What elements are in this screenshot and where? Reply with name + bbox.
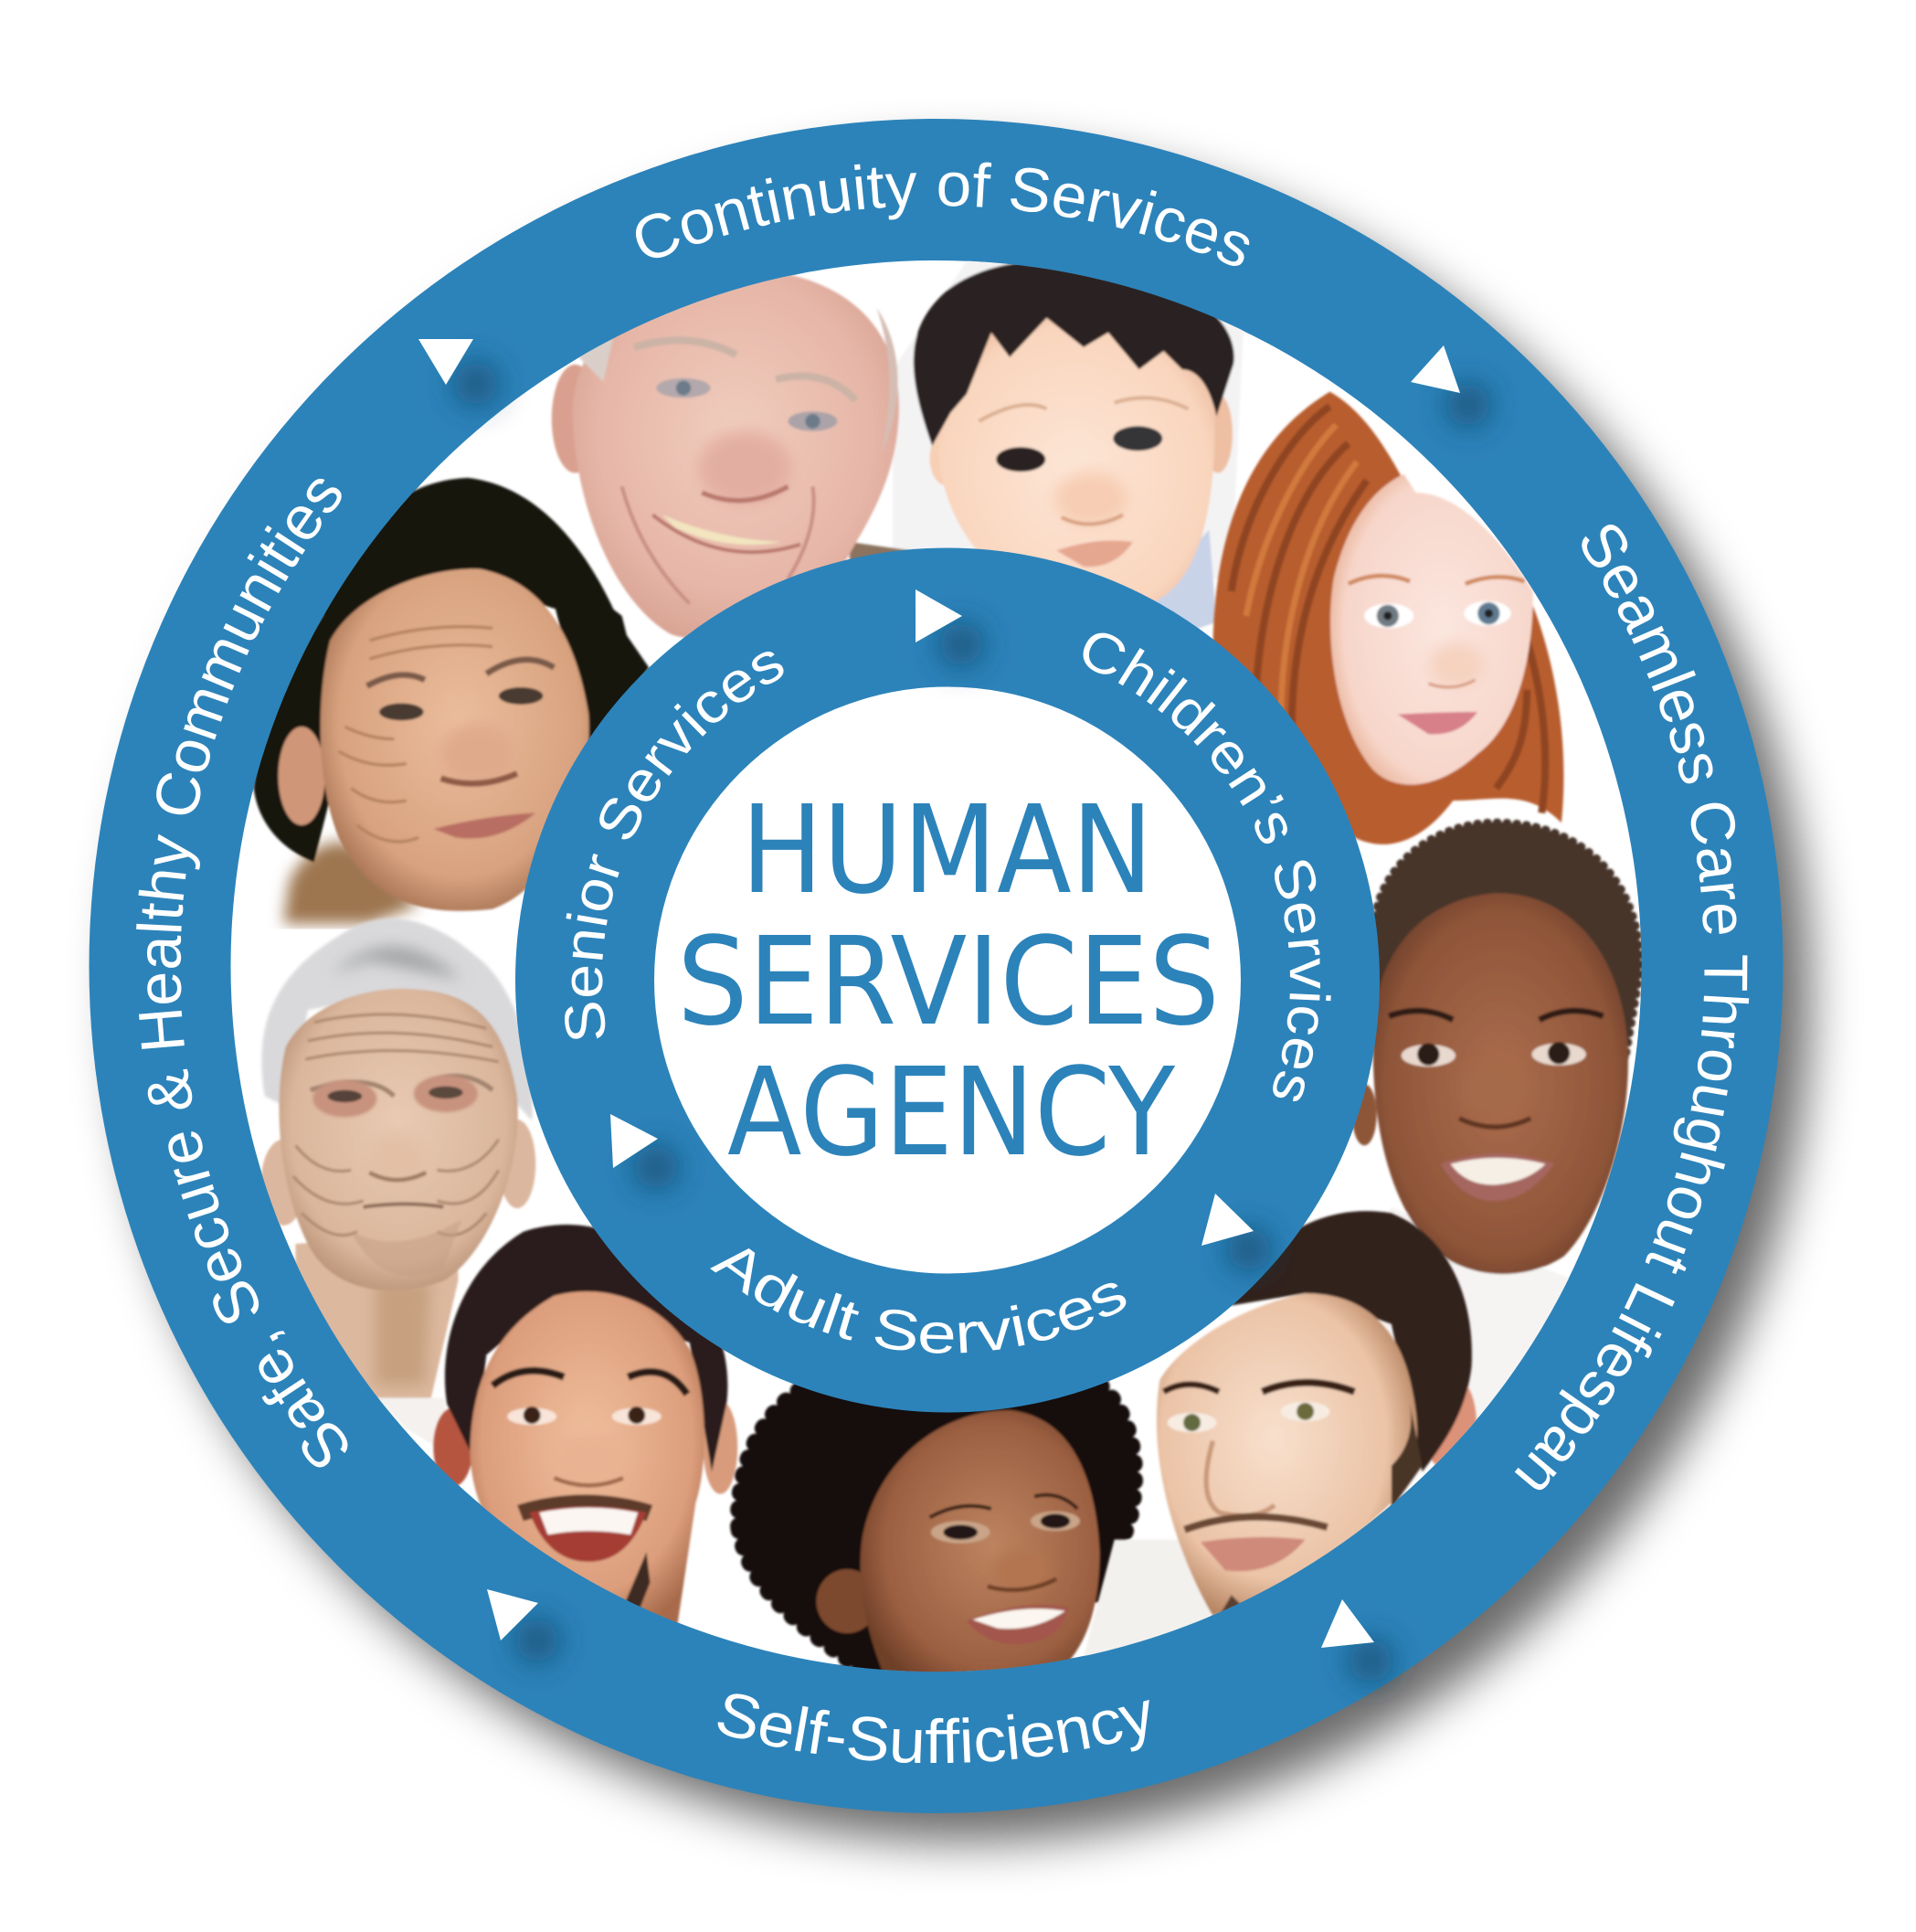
- arrow: outer bottom-left: [487, 1589, 538, 1640]
- label: Seamless Care Throughout Lifespan: Seamless Care Throughout Lifespan: [1515, 525, 1749, 1490]
- label: Senior Services: Senior Services: [565, 652, 784, 1039]
- label: Safe, Secure & Healthy Communities: Safe, Secure & Healthy Communities: [136, 479, 347, 1468]
- portrait: elderly woman with white hair: [261, 918, 535, 1460]
- portrait: old man: [552, 269, 936, 639]
- arrow: inner right: [1201, 1194, 1254, 1246]
- title: HUMAN: [741, 780, 1153, 921]
- arrow shadows: [454, 362, 1490, 1683]
- arrow: outer top-left: [418, 339, 473, 385]
- drop shadow of outer ring: [120, 151, 1810, 1842]
- panel: outer service ring: [90, 119, 1784, 1813]
- portrait: woman with afro: [738, 1374, 1135, 1682]
- label: Children's Services: Children’s Services: [1084, 632, 1331, 1101]
- portrait: baby: [893, 252, 1244, 634]
- arrow: outer top-right: [1411, 345, 1460, 393]
- panel: portrait photo area: [230, 252, 1641, 1682]
- panel: inner service ring: [515, 548, 1380, 1413]
- arrow: inner left: [610, 1114, 658, 1168]
- label: Self-Sufficiency: Self-Sufficiency: [718, 1693, 1149, 1763]
- panel: center circle: [654, 687, 1241, 1274]
- label: Continuity of Services: Continuity of Services: [636, 163, 1250, 266]
- label: Adult Services: Adult Services: [710, 1248, 1126, 1353]
- portrait: young boy: [1352, 823, 1640, 1460]
- portrait: red-haired girl: [1212, 392, 1563, 844]
- arrow: inner top: [916, 589, 962, 642]
- arrow: outer bottom-right: [1321, 1599, 1374, 1648]
- portrait: young man with stubble: [1084, 1211, 1477, 1657]
- title: AGENCY: [727, 1043, 1176, 1184]
- title: SERVICES: [677, 912, 1220, 1053]
- portrait: young man with goatee: [433, 1225, 737, 1626]
- title: [677, 780, 1220, 1184]
- portrait: elderly woman with dark hair: [254, 478, 649, 924]
